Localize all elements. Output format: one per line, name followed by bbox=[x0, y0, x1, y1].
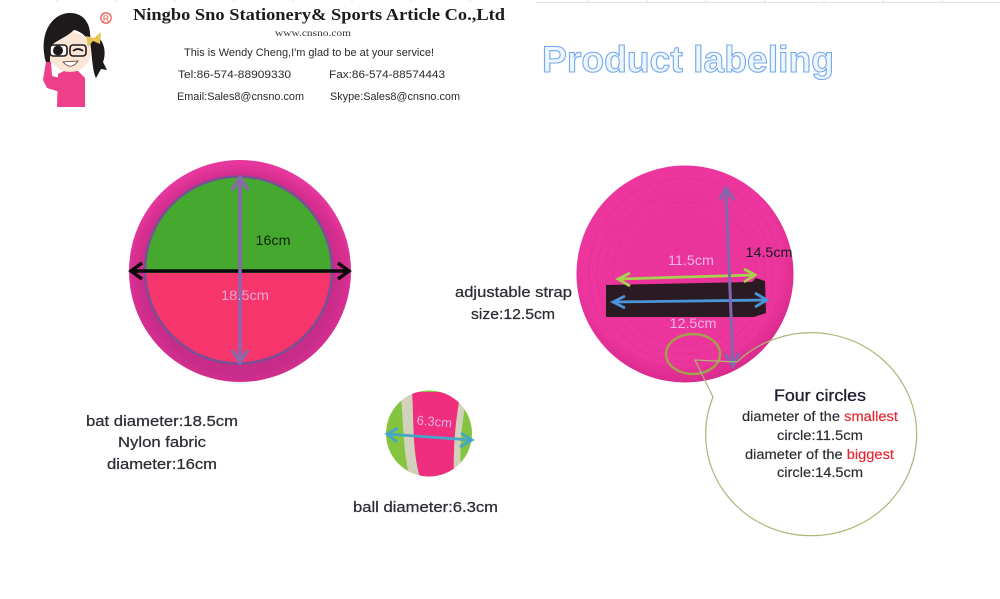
nylon fabric halves bbox=[146, 178, 331, 362]
strap caption bbox=[455, 284, 572, 323]
arrow: bat diameter bbox=[131, 263, 349, 279]
panel: bat back bbox=[576, 166, 794, 382]
arrow: smallest circle bbox=[618, 269, 755, 286]
bat caption bbox=[86, 413, 238, 473]
website: www.cnsno.com bbox=[275, 29, 352, 39]
greeting: This is Wendy Cheng,I'm glad to be at your service! bbox=[184, 47, 434, 59]
skype: Skype:Sales8@cnsno.com bbox=[330, 91, 460, 103]
label: 18.5cm: 18.5cm bbox=[221, 287, 269, 303]
bat rim bbox=[129, 160, 351, 382]
company name heading: Ningbo Sno Stationery& Sports Article Co.,Ltd bbox=[133, 5, 505, 24]
adjustable strap bbox=[606, 278, 766, 317]
label: 12.5cm: 12.5cm bbox=[670, 315, 716, 331]
icon: cartoon mascot bbox=[43, 13, 111, 107]
label: 6.3cm: 6.3cm bbox=[416, 413, 453, 431]
bat back disc bbox=[576, 166, 794, 382]
bat caption: bat diameter:18.5cm bbox=[86, 413, 238, 430]
icon: registered mark: R bbox=[103, 13, 109, 23]
strap caption: size:12.5cm bbox=[471, 306, 555, 323]
arrow: biggest circle bbox=[720, 188, 739, 366]
callout bubble background bbox=[695, 333, 917, 536]
ball caption: ball diameter:6.3cm bbox=[353, 499, 498, 516]
panel: ball bbox=[385, 390, 475, 480]
arrow: ball diameter bbox=[387, 428, 472, 447]
callout line: smallest: diameter of the smallest bbox=[742, 409, 898, 424]
spreadsheet gridline remnant bbox=[57, 0, 1000, 3]
bat caption: diameter:16cm bbox=[107, 456, 217, 473]
callout line: biggest: diameter of the biggest bbox=[745, 447, 894, 462]
panel: bat front bbox=[129, 160, 351, 382]
label: 11.5cm: 11.5cm bbox=[668, 252, 714, 268]
strap caption: adjustable strap bbox=[455, 284, 572, 301]
arrow: fabric diameter bbox=[232, 178, 248, 362]
bat caption: Nylon fabric bbox=[118, 434, 207, 451]
callout line: 11.5cm: circle:11.5cm bbox=[777, 428, 863, 443]
label: 16cm: 16cm bbox=[256, 232, 290, 248]
callout outline bbox=[695, 333, 917, 536]
label: 14.5cm: 14.5cm bbox=[746, 244, 792, 260]
fax: Fax:86-574-88574443 bbox=[329, 69, 445, 81]
email: Email:Sales8@cnsno.com bbox=[177, 91, 304, 103]
ring highlight bbox=[666, 334, 720, 374]
tennis ball bbox=[385, 390, 475, 480]
telephone: Tel:86-574-88909330 bbox=[178, 69, 291, 81]
callout line: 14.5cm: circle:14.5cm bbox=[777, 465, 863, 480]
callout: four circles bbox=[695, 333, 917, 536]
callout heading: Four circles bbox=[774, 386, 866, 405]
title: product labeling: Product labeling bbox=[542, 39, 834, 80]
arrow: strap bbox=[613, 293, 767, 308]
